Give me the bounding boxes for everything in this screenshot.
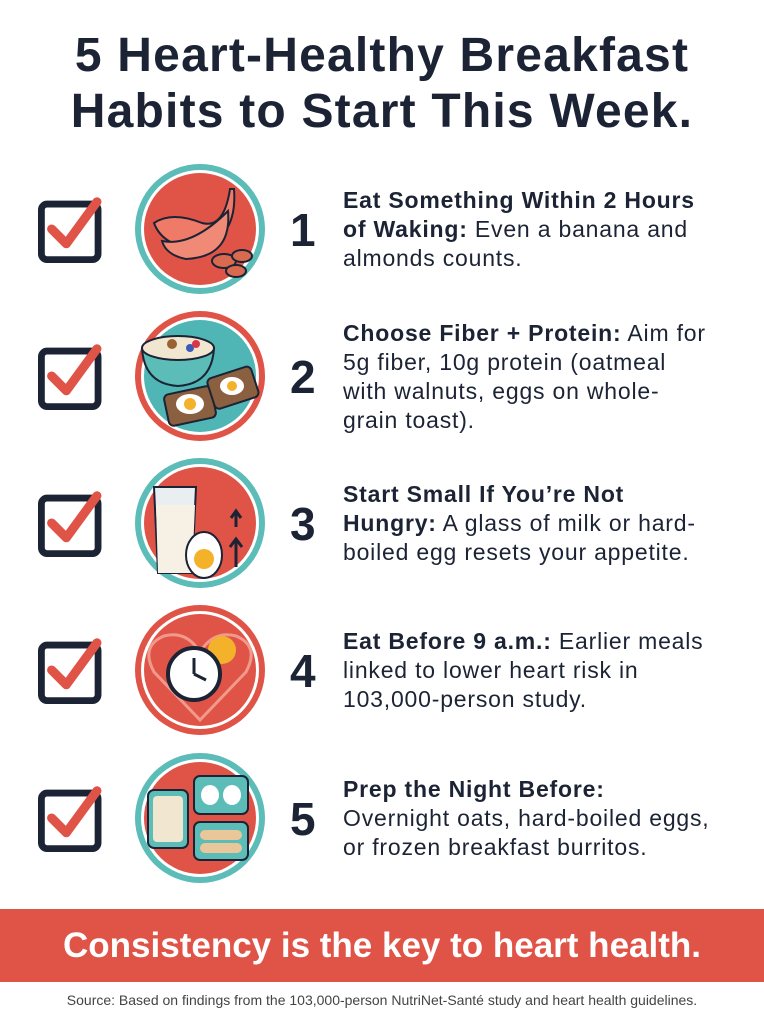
text 3 xyxy=(343,481,696,565)
number 4: 4 xyxy=(290,645,316,697)
row 3 xyxy=(38,458,696,588)
number 2: 2 xyxy=(290,351,316,403)
text 1: Eat Something Within 2 Hours xyxy=(343,187,695,213)
checkbox 5 xyxy=(38,786,102,852)
checkbox 1 xyxy=(38,197,102,263)
text 4: Eat Before 9 a.m.: Earlier meals xyxy=(343,628,703,654)
source note: Source: Based on findings from the 103,000-person NutriNet-Santé study and heart health guidelines. xyxy=(67,992,697,1008)
checkbox 3 xyxy=(38,491,102,557)
text 4: 103,000-person study. xyxy=(343,686,587,712)
text 3: Hungry: A glass of milk or hard- xyxy=(343,510,696,536)
number 3: 3 xyxy=(290,498,316,550)
text 2: Choose Fiber + Protein: Aim for xyxy=(343,320,706,346)
text 2 xyxy=(343,320,706,433)
text 5 xyxy=(343,776,710,860)
banner: Consistency is the key to heart health. xyxy=(63,926,701,965)
row 1 xyxy=(38,164,695,294)
text 2: grain toast). xyxy=(343,407,475,433)
text 2: 5g fiber, 10g protein (oatmeal xyxy=(343,349,666,375)
row 2 xyxy=(38,311,706,441)
text 5: Overnight oats, hard-boiled eggs, xyxy=(343,805,710,831)
text 2: with walnuts, eggs on whole- xyxy=(343,378,659,404)
title xyxy=(71,29,693,138)
text 5: Prep the Night Before: xyxy=(343,776,605,802)
icon: clock and heart xyxy=(135,605,265,735)
text 1: almonds counts. xyxy=(343,245,522,271)
icon: banana and almonds xyxy=(135,164,265,294)
checkbox 4 xyxy=(38,638,102,704)
number 5: 5 xyxy=(290,793,316,845)
icon: meal prep containers xyxy=(135,753,265,883)
text 1 xyxy=(343,187,695,271)
row 4 xyxy=(38,605,703,735)
text 3: Start Small If You’re Not xyxy=(343,481,624,507)
text 4 xyxy=(343,628,703,712)
icon: milk and egg xyxy=(135,458,265,588)
checkbox 2 xyxy=(38,344,102,410)
icon: oatmeal and toast xyxy=(135,311,265,441)
banner xyxy=(0,909,764,982)
text 3: boiled egg resets your appetite. xyxy=(343,539,690,565)
text 5: or frozen breakfast burritos. xyxy=(343,834,647,860)
text 1: of Waking: Even a banana and xyxy=(343,216,688,242)
row 5 xyxy=(38,753,710,883)
text 4: linked to lower heart risk in xyxy=(343,657,638,683)
title: 5 Heart-Healthy Breakfast xyxy=(75,29,689,82)
title: Habits to Start This Week. xyxy=(71,85,693,138)
number 1: 1 xyxy=(290,204,316,256)
